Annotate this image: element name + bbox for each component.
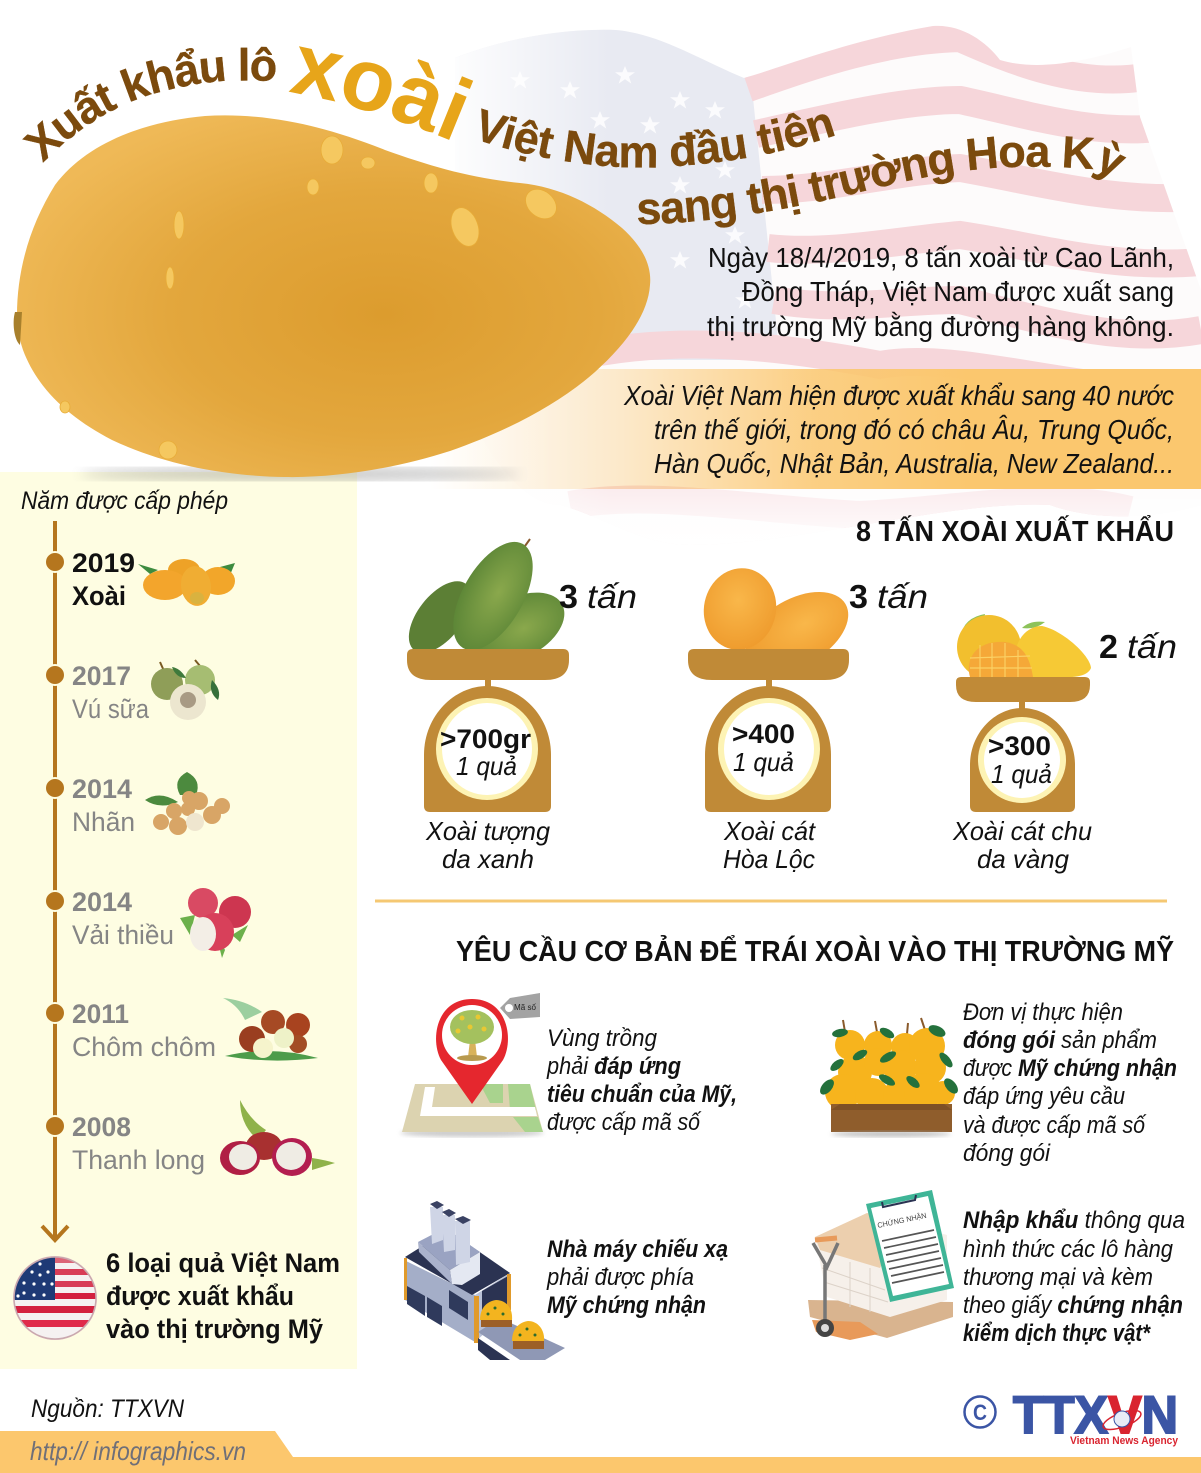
text block: shipment summary: Ngày 18/4/2019, 8 tấn xoài từ Cao Lãnh,	[708, 242, 1174, 273]
text block: growing area: tiêu chuẩn của Mỹ,	[547, 1081, 737, 1108]
footer band with URL	[0, 1431, 1201, 1473]
timeline entry: 2014 Nhãn: Nhãn	[72, 807, 135, 837]
text block: import conditions: thương mại và kèm	[963, 1264, 1153, 1291]
text block: packing unit: được Mỹ chứng nhận	[963, 1055, 1177, 1082]
scale 3: yellow mango: 2	[1099, 628, 1118, 665]
scale 1: green mango: Xoài tượng	[425, 816, 551, 846]
scale 1: green mango: da xanh	[442, 844, 534, 874]
scale 1: green mango: 1 quả	[456, 751, 517, 781]
text block: growing area	[546, 1025, 737, 1136]
scale 3: yellow mango	[952, 614, 1177, 874]
text block: growing area: được cấp mã số	[547, 1109, 702, 1136]
text block: six fruits summary	[106, 1248, 340, 1344]
text block: import conditions: theo giấy chứng nhận	[963, 1292, 1183, 1319]
scale 3: yellow mango: >300	[988, 731, 1051, 761]
icon: crate of mangoes	[817, 1018, 961, 1137]
text block: packing unit	[963, 999, 1177, 1167]
title: sang thị trường Hoa Kỳ	[638, 136, 1126, 228]
icon: star apple	[151, 660, 219, 720]
timeline entry: 2017 Vú sữa	[72, 661, 150, 724]
logo: TTXVN: TTXVN	[1013, 1386, 1178, 1445]
icon: dragon fruit	[220, 1100, 335, 1176]
timeline nodes	[45, 552, 65, 1136]
timeline entry: 2014 Nhãn	[72, 774, 135, 837]
text block: packing unit: đóng gói	[963, 1140, 1051, 1167]
scale 1: green mango	[397, 529, 637, 874]
title	[22, 46, 1126, 228]
text block: six fruits summary: 6 loại quả Việt Nam	[106, 1248, 340, 1278]
text block: shipment summary: thị trường Mỹ bằng đường hàng không.	[707, 311, 1174, 342]
text block: six fruits summary: vào thị trường Mỹ	[106, 1314, 323, 1344]
text block: packing unit: và được cấp mã số	[963, 1112, 1147, 1139]
scale 2: orange mango: Hòa Lộc	[723, 844, 815, 874]
timeline entry: 2019 Xoài	[72, 548, 135, 611]
logo: TTXVN: Vietnam News Agency	[1070, 1435, 1179, 1447]
scale 1: green mango: 3	[559, 578, 578, 615]
timeline entry: 2014 Nhãn: 2014	[72, 774, 132, 804]
text block: packing unit: đáp ứng yêu cầu	[963, 1083, 1125, 1110]
timeline entry: 2014 Vải thiều	[72, 887, 174, 950]
background: faded American flag	[493, 26, 1201, 528]
text block: packing unit: đóng gói sản phẩm	[963, 1027, 1157, 1054]
icon: longan	[145, 772, 230, 835]
text block: import conditions: Nhập khẩu thông qua	[963, 1207, 1185, 1234]
title: xoài	[288, 46, 474, 140]
timeline entry: 2008 Thanh long: 2008	[72, 1112, 131, 1142]
panel: orange note band	[430, 369, 1201, 489]
title: Xuất khẩu lô	[22, 46, 276, 163]
icon: pallet with certificate	[808, 1190, 954, 1340]
text block: irradiation plant: Nhà máy chiếu xạ	[547, 1236, 728, 1263]
scale 2: orange mango: tấn	[877, 578, 928, 615]
text block: shipment summary	[707, 242, 1174, 342]
text block: six fruits summary: được xuất khẩu	[106, 1281, 294, 1311]
timeline entry: 2019 Xoài: Xoài	[72, 581, 126, 611]
scale 2: orange mango: >400	[732, 719, 795, 749]
text block: import conditions: kiểm dịch thực vật*	[963, 1320, 1151, 1347]
scale 2: orange mango	[688, 561, 928, 874]
timeline entry: 2014 Vải thiều: Vải thiều	[72, 920, 174, 950]
scale 2: orange mango: Xoài cát	[723, 816, 817, 846]
title: Việt Nam đầu tiên	[481, 108, 835, 168]
text block: irradiation plant	[546, 1236, 728, 1319]
text block: shipment summary: Đồng Tháp, Việt Nam được xuất sang	[742, 276, 1174, 307]
text block: irradiation plant: Mỹ chứng nhận	[547, 1292, 706, 1319]
text block: import conditions: hình thức các lô hàng	[963, 1236, 1174, 1263]
timeline line with arrow	[42, 521, 68, 1240]
timeline entry: 2008 Thanh long: Thanh long	[72, 1145, 205, 1175]
main mango illustration	[14, 115, 650, 480]
timeline entry: 2014 Vải thiều: 2014	[72, 887, 132, 917]
icon: map pin with tree	[400, 993, 544, 1137]
icon: yellow mangoes	[957, 614, 1091, 679]
icon: orange mangoes	[704, 568, 848, 649]
scale 1: green mango: tấn	[587, 578, 637, 615]
heading: 8 tons exported: 8 TẤN XOÀI XUẤT KHẨU	[856, 514, 1174, 548]
text block: export markets	[623, 380, 1174, 479]
scale 2: orange mango: 1 quả	[733, 747, 794, 777]
text block: import conditions	[963, 1207, 1185, 1347]
scale 1: green mango: >700gr	[440, 724, 531, 754]
timeline entry: 2017 Vú sữa: 2017	[72, 661, 131, 691]
source: Nguồn: TTXVN	[31, 1395, 185, 1423]
scale 3: yellow mango: Xoài cát chu	[952, 816, 1092, 846]
icon: round US flag	[13, 1256, 97, 1340]
timeline entry: 2017 Vú sữa: Vú sữa	[72, 694, 150, 724]
timeline entry: 2011 Chôm chôm: Chôm chôm	[72, 1032, 216, 1062]
icon: rambutan	[223, 998, 318, 1061]
text block: growing area: Vùng trồng	[547, 1025, 658, 1052]
icon: green mangoes	[408, 538, 564, 649]
icon: mangoes	[138, 559, 235, 608]
scale 3: yellow mango: da vàng	[977, 844, 1070, 874]
logo: TTXVN: C	[973, 1400, 987, 1425]
text block: growing area: phải đáp ứng	[546, 1053, 681, 1080]
scale 3: yellow mango: tấn	[1127, 628, 1177, 665]
icon: pallet with certificate: CHỨNG NHẬN	[877, 1211, 927, 1230]
timeline entry: 2011 Chôm chôm	[72, 999, 216, 1062]
panel: timeline background	[0, 472, 357, 1369]
scale 3: yellow mango: 1 quả	[991, 759, 1052, 789]
text block: irradiation plant: phải được phía	[546, 1264, 694, 1291]
timeline caption: Năm được cấp phép	[21, 487, 228, 515]
text block: packing unit: Đơn vị thực hiện	[963, 999, 1123, 1026]
timeline entry: 2008 Thanh long	[72, 1112, 205, 1175]
scale 2: orange mango: 3	[849, 578, 868, 615]
timeline entry: 2019 Xoài: 2019	[72, 548, 135, 578]
timeline entry: 2011 Chôm chôm: 2011	[72, 999, 129, 1029]
footer band with URL: http:// infographics.vn	[30, 1436, 246, 1466]
icon: map pin with tree: Mã số	[514, 1003, 537, 1012]
icon: irradiation factory	[404, 1201, 565, 1360]
icon: lychee	[180, 888, 251, 958]
